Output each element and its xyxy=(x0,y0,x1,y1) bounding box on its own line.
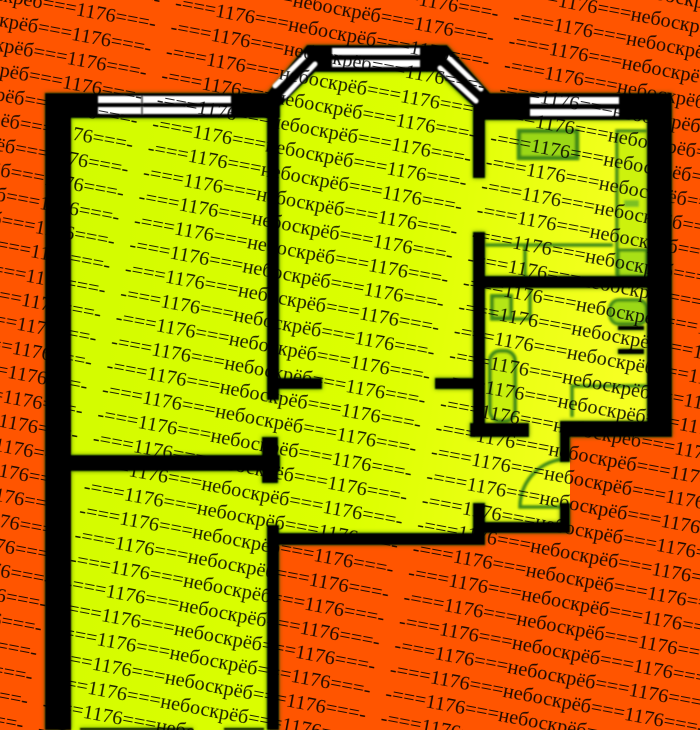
floor plan area xyxy=(71,50,650,730)
stub walls xyxy=(275,378,322,389)
windows xyxy=(98,48,619,116)
room divider wall xyxy=(267,93,279,400)
kitchen bath partition xyxy=(473,276,647,288)
lower room right wall xyxy=(267,525,279,730)
bay window walls xyxy=(267,45,490,120)
bay window centre xyxy=(332,48,420,67)
left window xyxy=(98,95,231,115)
small bathroom marks xyxy=(618,326,644,330)
bay window right xyxy=(440,58,481,101)
top left wall xyxy=(45,93,280,118)
entrance bottom wall xyxy=(473,522,570,533)
washbasin xyxy=(610,300,647,324)
bathroom bottom walls xyxy=(560,421,672,437)
furniture xyxy=(485,131,647,507)
door jamb upper xyxy=(560,421,570,462)
right corridor wall upper xyxy=(473,93,485,178)
right corridor wall lower xyxy=(473,232,485,430)
kitchen table xyxy=(519,131,577,158)
kitchen counter xyxy=(617,131,647,276)
door jamb lower xyxy=(560,503,570,533)
bathroom cabinet xyxy=(572,386,647,417)
bottom wall fragments xyxy=(80,728,193,730)
door swing xyxy=(520,459,563,507)
bay window left xyxy=(275,56,315,96)
outer right wall xyxy=(647,93,672,437)
kitchen partition xyxy=(485,245,613,278)
toilet xyxy=(490,288,530,319)
horizontal room divider xyxy=(45,455,280,471)
kitchen stove xyxy=(618,250,647,277)
outer left wall xyxy=(45,93,71,730)
bathtub xyxy=(490,351,515,421)
bottom corridor wall xyxy=(267,533,485,545)
top right wall xyxy=(473,93,672,120)
right window xyxy=(530,97,619,116)
